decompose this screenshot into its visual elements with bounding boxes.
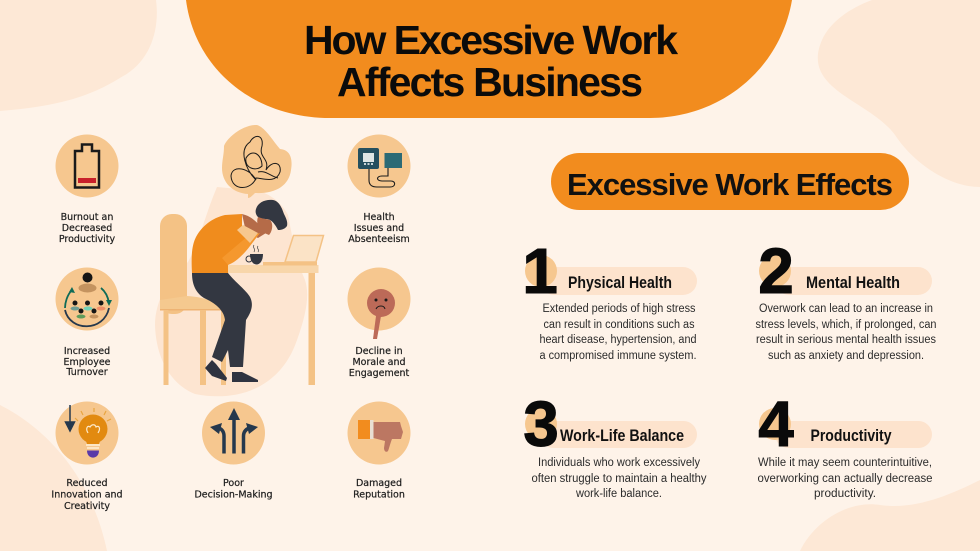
- icon group: decline in morale: Engagement: [349, 368, 410, 379]
- icon group: turnover: Employee: [63, 357, 111, 368]
- effect 1: physical health: can result in conditions such as: [544, 319, 695, 331]
- effect 3: work-life balance: often struggle to maintain a healthy: [532, 473, 707, 485]
- icon group: decline in morale: Morale and: [352, 357, 406, 368]
- title banner: [186, 0, 792, 118]
- icon group: decision-making: Decision-Making: [194, 490, 273, 500]
- title: How Excessive Work: [304, 17, 678, 63]
- effect 3: work-life balance: Individuals who work excessively: [538, 457, 700, 469]
- icon group: decline in morale: Decline in: [355, 346, 403, 357]
- icon group: health issues: Health: [363, 212, 395, 223]
- icon group: health issues: Absenteeism: [348, 234, 410, 245]
- icon group: turnover: Turnover: [65, 367, 108, 378]
- effect 3: work-life balance: 3: [523, 388, 559, 460]
- effect 4: productivity: productivity.: [814, 488, 876, 500]
- effect 1: physical health: 1: [522, 235, 558, 307]
- effect 4: productivity: [758, 388, 932, 500]
- icon group: innovation: [51, 402, 123, 512]
- effect 3: work-life balance: [523, 388, 707, 500]
- effect 2: mental health: stress levels, which, if prolonged, can: [756, 319, 936, 331]
- effect 4: productivity: overworking can actually decrease: [758, 473, 932, 485]
- effect 4: productivity: Productivity: [810, 426, 892, 445]
- icon group: decline in morale: [348, 268, 410, 379]
- title: Affects Business: [337, 59, 643, 105]
- icon group: health issues: Issues and: [354, 223, 404, 234]
- illustration: stressed worker: [155, 125, 324, 396]
- thought bubble: [222, 125, 292, 198]
- icon group: decision-making: [194, 402, 273, 500]
- effect 3: work-life balance: Work-Life Balance: [560, 426, 684, 445]
- icon group: burnout: Productivity: [59, 234, 116, 245]
- effect 2: mental health: Overwork can lead to an increase in: [759, 303, 933, 315]
- effect 2: mental health: 2: [758, 235, 794, 307]
- effect 3: work-life balance: work-life balance.: [575, 488, 662, 500]
- effect 4: productivity: While it may seem counterintuitive,: [758, 457, 932, 469]
- effect 2: mental health: result in serious mental health issues: [756, 334, 936, 346]
- icon group: reputation: [348, 402, 410, 500]
- effect 2: mental health: Mental Health: [806, 273, 900, 292]
- section heading pill: [551, 153, 909, 210]
- chair: [160, 214, 228, 385]
- icon group: turnover: [56, 268, 118, 378]
- effect 2: mental health: [756, 235, 936, 362]
- desk and laptop: [228, 236, 324, 385]
- icon group: decision-making: Poor: [223, 478, 244, 489]
- effect 1: physical health: Physical Health: [568, 273, 672, 292]
- icon group: reputation: Damaged: [356, 478, 402, 489]
- icon group: reputation: Reputation: [353, 490, 405, 500]
- effect 1: physical health: Extended periods of high stress: [542, 303, 696, 315]
- effect 1: physical health: heart disease, hypertension, and: [540, 334, 696, 346]
- icon group: burnout: Burnout an: [61, 212, 113, 223]
- effect 2: mental health: such as anxiety and depression.: [768, 350, 924, 362]
- icon group: innovation: Innovation and: [51, 490, 123, 500]
- icon group: innovation: Creativity: [64, 501, 110, 512]
- icon group: burnout: Decreased: [62, 223, 112, 234]
- icon group: burnout: [56, 134, 118, 245]
- effect 1: physical health: a compromised immune system.: [540, 350, 696, 362]
- title: [304, 17, 678, 105]
- coffee cup: [246, 245, 263, 264]
- icon group: health issues: [348, 134, 410, 245]
- icon group: turnover: Increased: [64, 346, 110, 357]
- icon group: innovation: Reduced: [66, 478, 108, 489]
- effect 1: physical health: [522, 235, 697, 362]
- person: [192, 200, 287, 382]
- section heading pill: Excessive Work Effects: [567, 167, 893, 202]
- effect 4: productivity: 4: [758, 388, 794, 460]
